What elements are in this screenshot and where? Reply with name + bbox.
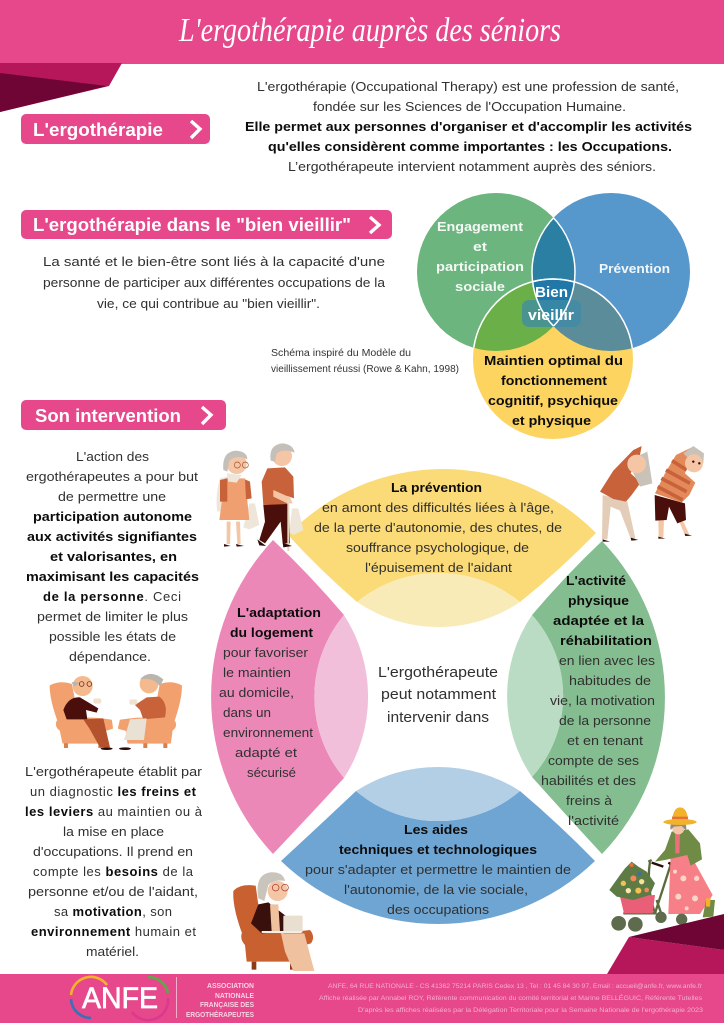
venn label: maintien: et physique xyxy=(512,413,591,428)
badge: L'ergothérapie: L'ergothérapie xyxy=(33,120,163,140)
icon: couple in armchairs xyxy=(51,674,181,750)
panel: aides techniques xyxy=(281,767,595,924)
panel: adaptation du logement: adapté et xyxy=(235,745,297,760)
association name: ASSOCIATION xyxy=(207,983,254,990)
venn label: engagement: participation xyxy=(436,259,524,274)
left text block: diagnostic: compte les besoins de la xyxy=(33,864,194,879)
intro text block: qu'elles considèrent comme importantes : les Occupations. xyxy=(268,139,672,154)
panel: activite physique: en lien avec les xyxy=(559,653,656,668)
panel: adaptation du logement: le maintien xyxy=(223,665,291,680)
association name: ERGOTHÉRAPEUTES xyxy=(186,1010,254,1019)
left text block: diagnostic: la mise en place xyxy=(63,824,164,839)
bien vieillir text block: personne de participer aux différentes occupations de la xyxy=(43,275,386,290)
intro text block: Elle permet aux personnes d'organiser et d'accomplir les activités xyxy=(245,119,692,134)
center text: intervenir dans xyxy=(387,710,489,726)
left text block: action: maximisant les capacités xyxy=(26,569,199,584)
badge: bien vieillir xyxy=(21,210,392,239)
left text block: diagnostic xyxy=(25,764,203,959)
intro text block: L'ergothérapie (Occupational Therapy) est une profession de santé, xyxy=(257,79,679,94)
panel: activite physique: physique xyxy=(568,593,629,608)
panel: adaptation du logement: du logement xyxy=(230,625,314,640)
intro text block: L’ergothérapeute intervient notamment auprès des séniors. xyxy=(288,159,656,174)
panel: activite physique: de la personne xyxy=(559,713,651,728)
panel: aides techniques: des occupations xyxy=(387,902,490,917)
left text block: diagnostic: sa motivation, son xyxy=(54,904,172,919)
panel: aides techniques: techniques et technologiques xyxy=(339,842,537,857)
logo: ANFE xyxy=(71,977,168,1020)
bien vieillir text block xyxy=(43,254,386,311)
panel: la prevention: souffrance psychologique, de xyxy=(346,540,529,555)
center text: L'ergothérapeute xyxy=(378,665,498,681)
venn label: maintien: fonctionnement xyxy=(501,373,608,388)
association name xyxy=(186,983,254,1019)
corner decoration bottom right xyxy=(607,914,724,974)
panel: adaptation du logement: environnement xyxy=(223,725,313,740)
icon: woman with laptop in armchair xyxy=(233,872,314,971)
venn diagram xyxy=(417,193,690,439)
panel: adaptation du logement: dans un xyxy=(223,705,271,720)
venn label: maintien: cognitif, psychique xyxy=(488,393,618,408)
panel: activite physique xyxy=(507,541,665,854)
left text block: action xyxy=(26,449,199,664)
badge: bien vieillir: L'ergothérapie dans le "bien vieillir" xyxy=(33,215,351,235)
panel: la prevention: l'épuisement de l'aidant xyxy=(365,560,512,575)
left text block: action: et valorisantes, en xyxy=(50,549,177,564)
footer credits: Affiche réalisée par Annabel ROY, Référente communication du comité territorial et Marine BELLÉGUIC, Référente Tutelles xyxy=(319,993,703,1002)
panel: la prevention: La prévention xyxy=(391,480,482,495)
venn diagram caption: vieillissement réussi (Rowe & Kahn, 1998) xyxy=(271,364,459,375)
left text block: action: aux activités signifiantes xyxy=(27,529,197,544)
left text block: action: permet de limiter le plus xyxy=(37,609,189,624)
panel: activite physique: L'activité xyxy=(566,573,626,588)
icon: woman with rollator xyxy=(609,807,715,932)
panel: la prevention: de la perte d'autonomie, des chutes, de xyxy=(314,520,562,535)
panel: activite physique: réhabilitation xyxy=(560,633,652,648)
bien vieillir text block: La santé et le bien-être sont liés à la capacité d'une xyxy=(43,254,385,269)
badge: son intervention: Son intervention xyxy=(35,406,181,426)
left text block: diagnostic: L'ergothérapeute établit par xyxy=(25,764,203,779)
panel: adaptation du logement xyxy=(211,540,368,854)
left text block: action: participation autonome xyxy=(33,509,192,524)
panel: activite physique: vie, la motivation xyxy=(550,693,655,708)
badge: son intervention xyxy=(21,400,226,430)
header banner xyxy=(0,0,724,64)
venn label: maintien: Maintien optimal du xyxy=(484,353,623,368)
footer band xyxy=(0,974,724,1023)
left text block: action: possible les états de xyxy=(49,629,176,644)
panel: la prevention xyxy=(288,469,596,627)
venn label: bien vieillir xyxy=(528,284,574,324)
panel: adaptation du logement: sécurisé xyxy=(247,765,296,780)
left text block: diagnostic: personne et/ou de l'aidant, xyxy=(28,884,198,899)
footer credits xyxy=(319,983,703,1014)
panel: activite physique: freins à xyxy=(566,793,613,808)
venn label: engagement: sociale xyxy=(455,279,505,294)
corner decoration top left xyxy=(0,63,122,112)
venn label: engagement: et xyxy=(473,239,488,254)
left text block: diagnostic: les leviers au maintien ou à xyxy=(25,804,203,819)
left text block: action: de la personne. Ceci xyxy=(43,589,181,604)
panel: activite physique: et en tenant xyxy=(567,733,643,748)
panel: activite physique: l'activité xyxy=(568,813,619,828)
venn label: prevention: Prévention xyxy=(599,261,670,276)
panel: activite physique: habilités et des xyxy=(541,773,637,788)
footer credits: D'après les affiches réalisées par la Délégation Territoriale pour la Semaine Nationale de l'ergothérapie 2023 xyxy=(358,1007,703,1014)
association name: FRANÇAISE DES xyxy=(200,1002,254,1009)
panel: aides techniques: Les aides xyxy=(404,822,468,837)
venn label: bien vieillir: vieillir xyxy=(528,307,574,324)
venn label: engagement: Engagement xyxy=(437,219,524,234)
panel: activite physique: habitudes de xyxy=(569,673,651,688)
center text xyxy=(378,665,498,726)
panel: aides techniques: pour s'adapter et permettre le maintien de xyxy=(305,862,571,877)
panel: adaptation du logement: au domicile, xyxy=(219,685,294,700)
association name: NATIONALE xyxy=(215,993,254,1000)
center text: peut notamment xyxy=(381,687,496,703)
venn label: maintien xyxy=(484,353,623,428)
left text block: action: de permettre une xyxy=(58,489,166,504)
bien vieillir text block: vie, ce qui contribue au "bien vieillir". xyxy=(97,296,320,311)
panel: activite physique: compte de ses xyxy=(548,753,640,768)
footer credits: ANFE, 64 RUE NATIONALE - CS 41362 75214 PARIS Cedex 13 , Tel : 01 45 84 30 97, Email : accueil@anfe.fr, www.anfe.fr xyxy=(328,983,703,990)
venn label: engagement xyxy=(436,219,524,294)
panel: adaptation du logement: pour favoriser xyxy=(223,645,309,660)
left text block: diagnostic: un diagnostic les freins et xyxy=(30,784,197,799)
icon: seniors stretching xyxy=(600,446,704,542)
left text block: diagnostic: matériel. xyxy=(86,944,139,959)
venn diagram caption: Schéma inspiré du Modèle du xyxy=(271,348,411,359)
intro text block xyxy=(245,79,692,174)
badge: L'ergothérapie xyxy=(21,114,210,144)
left text block: action: L'action des xyxy=(76,449,150,464)
left text block: diagnostic: environnement humain et xyxy=(31,924,196,939)
venn diagram caption xyxy=(271,348,459,375)
panel: adaptation du logement: L'adaptation xyxy=(237,605,321,620)
panel: aides techniques: l'autonomie, de la vie sociale, xyxy=(344,882,528,897)
intro text block: fondée sur les Sciences de l'Occupation Humaine. xyxy=(313,99,626,114)
icon: elderly couple walking xyxy=(217,443,303,551)
panel: activite physique: adaptée et la xyxy=(553,613,645,628)
left text block: action: ergothérapeutes a pour but xyxy=(26,469,198,484)
venn label: bien vieillir: Bien xyxy=(535,284,568,301)
logo: ANFE: ANFE xyxy=(82,982,158,1015)
panel: la prevention: en amont des difficultés liées à l'âge, xyxy=(322,500,554,515)
title: L'ergothérapie auprès des séniors xyxy=(178,12,561,49)
left text block: action: dépendance. xyxy=(69,649,151,664)
left text block: diagnostic: d'occupations. Il prend en xyxy=(33,844,193,859)
